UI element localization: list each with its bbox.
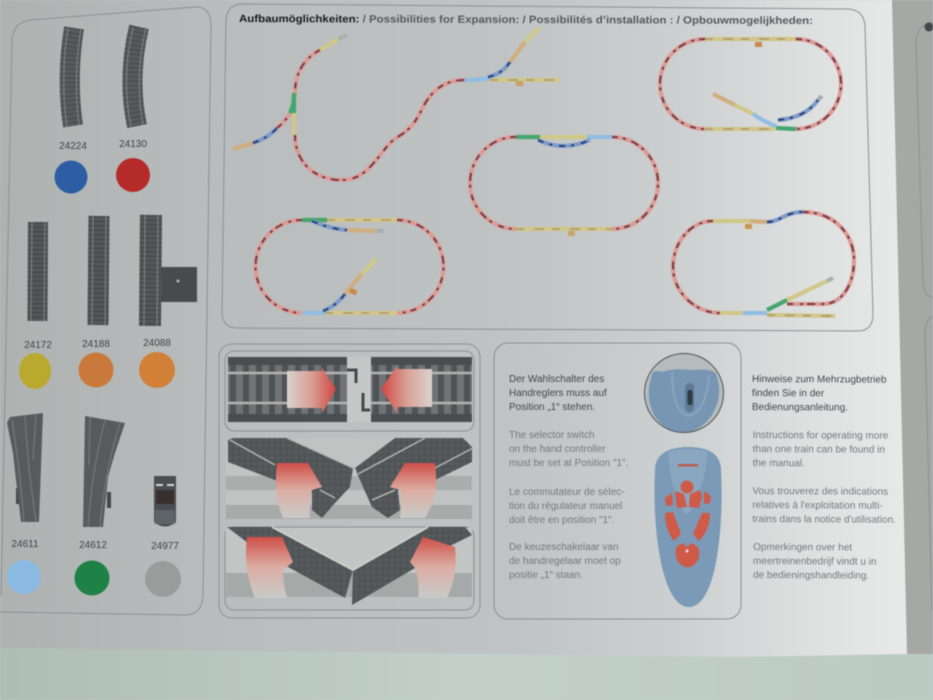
text: German: Handreglers muss auf: [509, 388, 607, 399]
note German: Hinweise zum Mehrzugbetrieb: [752, 374, 887, 386]
layout: lower left oval: [256, 220, 444, 313]
heading: Aufbaumöglichkeiten: / Possibilities for Expansion: / Possibilités d’installation : / Opbouwmogelijkheden:: [239, 13, 813, 27]
layout: lower right loop: [673, 212, 854, 316]
note German: finden Sie in der: [752, 388, 825, 399]
colour dot green: [74, 560, 110, 596]
note English: the manual.: [753, 458, 805, 469]
note French: Vous trouverez des indications: [752, 486, 888, 498]
panel: track pieces: [0, 7, 211, 615]
note English: than one train can be found in: [753, 444, 885, 456]
track 24188: [92, 216, 106, 325]
label 24977: 24977: [151, 541, 179, 552]
row: tracks angled before coupling: [226, 438, 473, 520]
text: Dutch: De keuzeschakelaar van: [509, 542, 619, 553]
colour dot yellow: [19, 353, 51, 389]
panel: possibilities for expansion: [222, 4, 873, 331]
note French: trains dans la notice d'utilisation.: [752, 514, 896, 526]
label 24611: 24611: [11, 539, 39, 550]
note Dutch: meertreinenbedrijf vindt u in: [753, 556, 876, 568]
colour dot blue: [54, 160, 88, 194]
arrow curved right: [390, 463, 436, 518]
panel: track connection: [219, 344, 480, 618]
buffer stop 24977: [154, 476, 176, 526]
layout: centre oval with passing loop: [470, 137, 658, 236]
row: connecting tracks top view: [225, 351, 474, 431]
colour dot orange: [78, 352, 114, 388]
text: English: must be set at Position "1".: [509, 458, 628, 469]
arrow curved left: [246, 537, 293, 598]
row: tracks coupled: [225, 527, 474, 610]
turnout 24611: [7, 413, 43, 522]
turnout 24612: [83, 416, 125, 527]
label 24188: 24188: [82, 339, 110, 350]
text: Dutch: de handregelaar moet op: [509, 556, 621, 567]
colour dot grey: [145, 561, 181, 597]
label 24612: 24612: [79, 540, 107, 551]
bottom surface: [0, 640, 933, 700]
note Dutch: Opmerkingen over het: [753, 542, 852, 554]
gap between pages: [885, 0, 933, 654]
icon: selector switch closeup: [644, 354, 724, 432]
text: English: The selector switch: [509, 430, 595, 441]
note English: Instructions for operating more: [753, 430, 889, 442]
text: French: Le commutateur de sélec-: [509, 487, 625, 498]
track 24130: [126, 27, 146, 127]
icon: hand controller: [654, 447, 722, 607]
arrow curved right: [410, 537, 456, 598]
arrow curved left: [276, 463, 322, 518]
track 24224: [64, 28, 81, 127]
label 24224: 24224: [59, 141, 87, 152]
track 24172: [31, 222, 45, 321]
label 24088: 24088: [143, 338, 171, 349]
text: German: Position „1“ stehen.: [509, 402, 595, 413]
colour dot red: [116, 158, 150, 192]
arrow left: [381, 366, 432, 413]
layout: open line: [233, 28, 560, 180]
label 24130: 24130: [119, 139, 147, 150]
note German: Bedienungsanleitung.: [752, 402, 848, 414]
label 24172: 24172: [24, 340, 52, 351]
text: French: tion du régulateur manuel: [509, 501, 622, 512]
colour dot light blue: [7, 560, 41, 594]
arrow right: [287, 368, 336, 413]
track 24088 with connection box: [144, 215, 197, 326]
text: French: doit être en position "1".: [509, 515, 614, 526]
colour dot orange: [139, 352, 175, 388]
text: English: on the hand controller: [509, 444, 606, 455]
layout: oval with siding top right: [660, 39, 841, 129]
note Dutch: de bedieningshandleiding.: [753, 570, 869, 582]
text: multi-train notes: [751, 374, 897, 582]
panel: selector switch: [494, 343, 741, 619]
neighbouring page panels: [916, 22, 933, 610]
note French: relatives à l'exploitation multi-: [752, 500, 883, 512]
text: German: Der Wahlschalter des: [509, 374, 604, 385]
text: Dutch: positie „1“ staan.: [509, 570, 583, 581]
